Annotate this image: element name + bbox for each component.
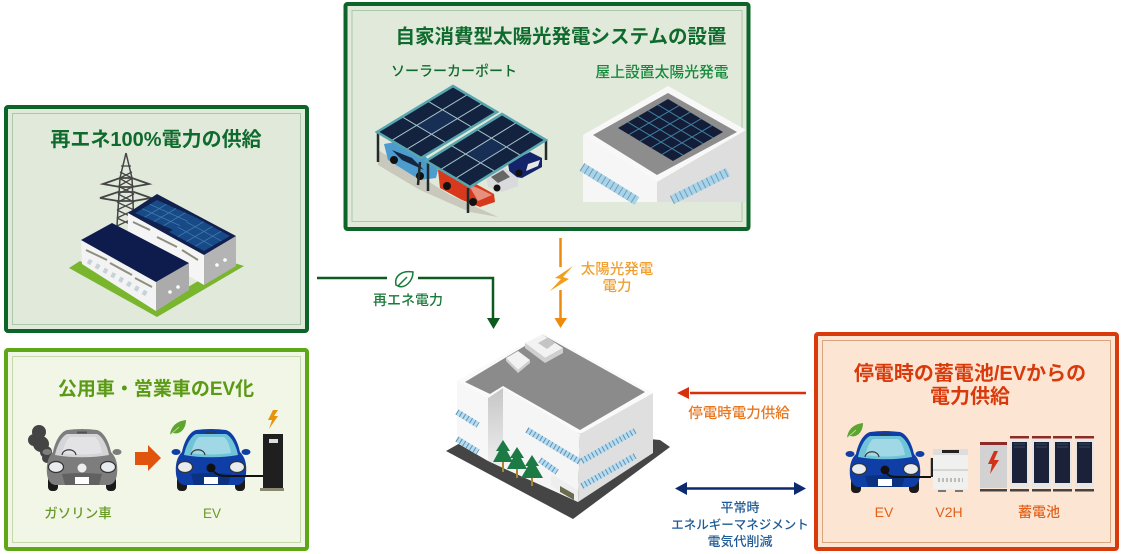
- icon: blue EV: [846, 431, 924, 493]
- label: EV: EV: [203, 506, 221, 521]
- illustration: central office building: [446, 333, 670, 519]
- label: gasoline car: ガソリン車: [44, 505, 112, 521]
- label: storage battery: 蓄電池: [1018, 504, 1060, 520]
- icon: exhaust smoke: [28, 425, 52, 463]
- illustration: rooftop solar building: [582, 86, 746, 202]
- icon: trees: [493, 440, 543, 486]
- label: solar power: 電力: [602, 278, 632, 295]
- label: V2H: V2H: [935, 504, 963, 520]
- arrow: solar power: [550, 238, 573, 328]
- panel: fleet vehicle EV conversion: [6, 350, 307, 549]
- illustration: factory buildings with solar roof: [69, 194, 244, 317]
- heading: 100% renewable power: 再エネ100%電力の供給: [50, 128, 262, 151]
- illustration: solar carport: [377, 86, 546, 217]
- arrow: gasoline to EV: [135, 445, 161, 471]
- label: EV: EV: [875, 504, 894, 520]
- arrow: renewable power: [317, 272, 500, 329]
- heading: outage power supply: [854, 362, 1086, 408]
- label: solar power: [581, 261, 654, 295]
- label: solar carport: ソーラーカーポート: [391, 63, 517, 79]
- label: outage power supply: 停電時電力供給: [688, 405, 790, 422]
- label: solar power: 太陽光発電: [581, 261, 654, 278]
- panel: outage battery and EV power: [816, 334, 1117, 549]
- icon: battery storage: [980, 436, 1094, 492]
- label: normal time energy management: 電気代削減: [707, 534, 773, 549]
- label: normal time energy management: エネルギーマネジメント: [671, 518, 809, 532]
- heading: outage power supply: 電力供給: [930, 385, 1010, 408]
- panel: self-consumption solar installation: [346, 4, 748, 229]
- heading: fleet EV conversion: 公用車・営業車のEV化: [58, 378, 254, 400]
- panel: 100% renewable power supply: [6, 107, 307, 331]
- label: normal time energy management: [671, 500, 809, 549]
- icon: gasoline car: [42, 429, 122, 491]
- icon: leaf: [170, 420, 186, 435]
- icon: leaf: [847, 423, 863, 438]
- label: renewable power: 再エネ電力: [373, 292, 443, 308]
- icon: charging bolt: [268, 410, 278, 429]
- icon: leaf outline: [396, 272, 413, 287]
- icon: transmission tower: [100, 153, 151, 226]
- label: normal time energy management: 平常時: [720, 500, 760, 515]
- icon: charging station: [211, 434, 284, 491]
- arrow: normal time energy management: [675, 482, 806, 495]
- icon: V2H unit: [885, 449, 968, 491]
- heading: self-consumption solar system: 自家消費型太陽光発電システムの設置: [396, 26, 726, 48]
- label: rooftop solar: 屋上設置太陽光発電: [595, 64, 729, 81]
- icon: blue EV: [172, 429, 250, 491]
- heading: outage power supply: 停電時の蓄電池/EVからの: [854, 362, 1086, 385]
- icon: lightning bolt: [550, 266, 573, 291]
- arrow: outage power supply: [677, 387, 806, 399]
